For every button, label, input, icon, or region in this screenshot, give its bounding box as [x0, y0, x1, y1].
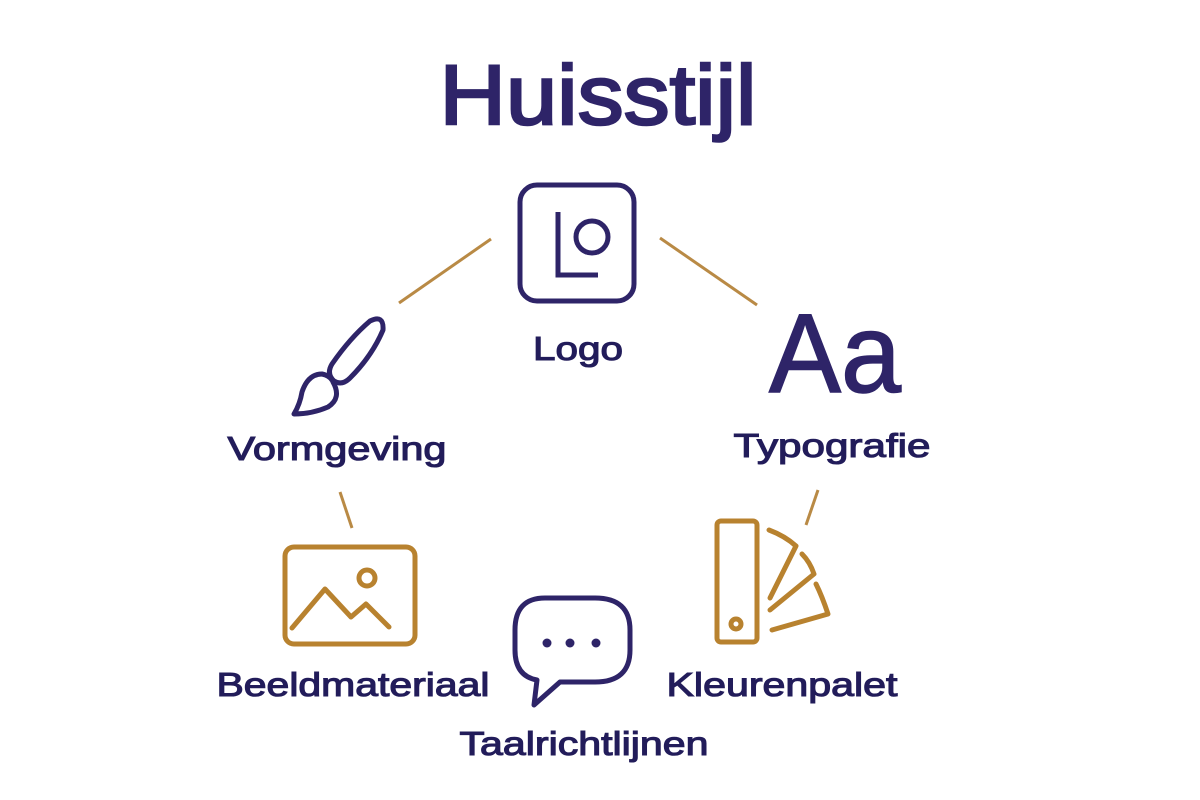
icon: logo square [520, 185, 634, 301]
connector: logo to vormgeving [399, 239, 491, 303]
icon: image [285, 547, 415, 644]
node: typografie [734, 291, 930, 464]
node: beeldmateriaal [216, 547, 490, 703]
label: logo: Logo [533, 330, 623, 367]
label: vormgeving: Vormgeving [228, 430, 446, 467]
icon: paintbrush [294, 319, 383, 414]
node: kleurenpalet [666, 521, 898, 703]
icon: Aa: Aa [769, 291, 902, 416]
node: taalrichtlijnen [460, 598, 708, 762]
node: vormgeving [228, 319, 446, 467]
connector: logo to typografie [660, 238, 757, 305]
label: kleurenpalet: Kleurenpalet [666, 666, 898, 703]
label: beeldmateriaal: Beeldmateriaal [216, 666, 490, 703]
label: taalrichtlijnen: Taalrichtlijnen [460, 725, 708, 762]
label: typografie: Typografie [734, 427, 930, 464]
connector: typografie to kleurenpalet [806, 490, 818, 525]
connector: vormgeving to beeldmateriaal [340, 492, 352, 528]
icon: speech bubble [515, 598, 630, 705]
icon: color swatches [717, 521, 828, 642]
node: logo [520, 185, 634, 367]
title: Huisstijl [440, 48, 756, 142]
